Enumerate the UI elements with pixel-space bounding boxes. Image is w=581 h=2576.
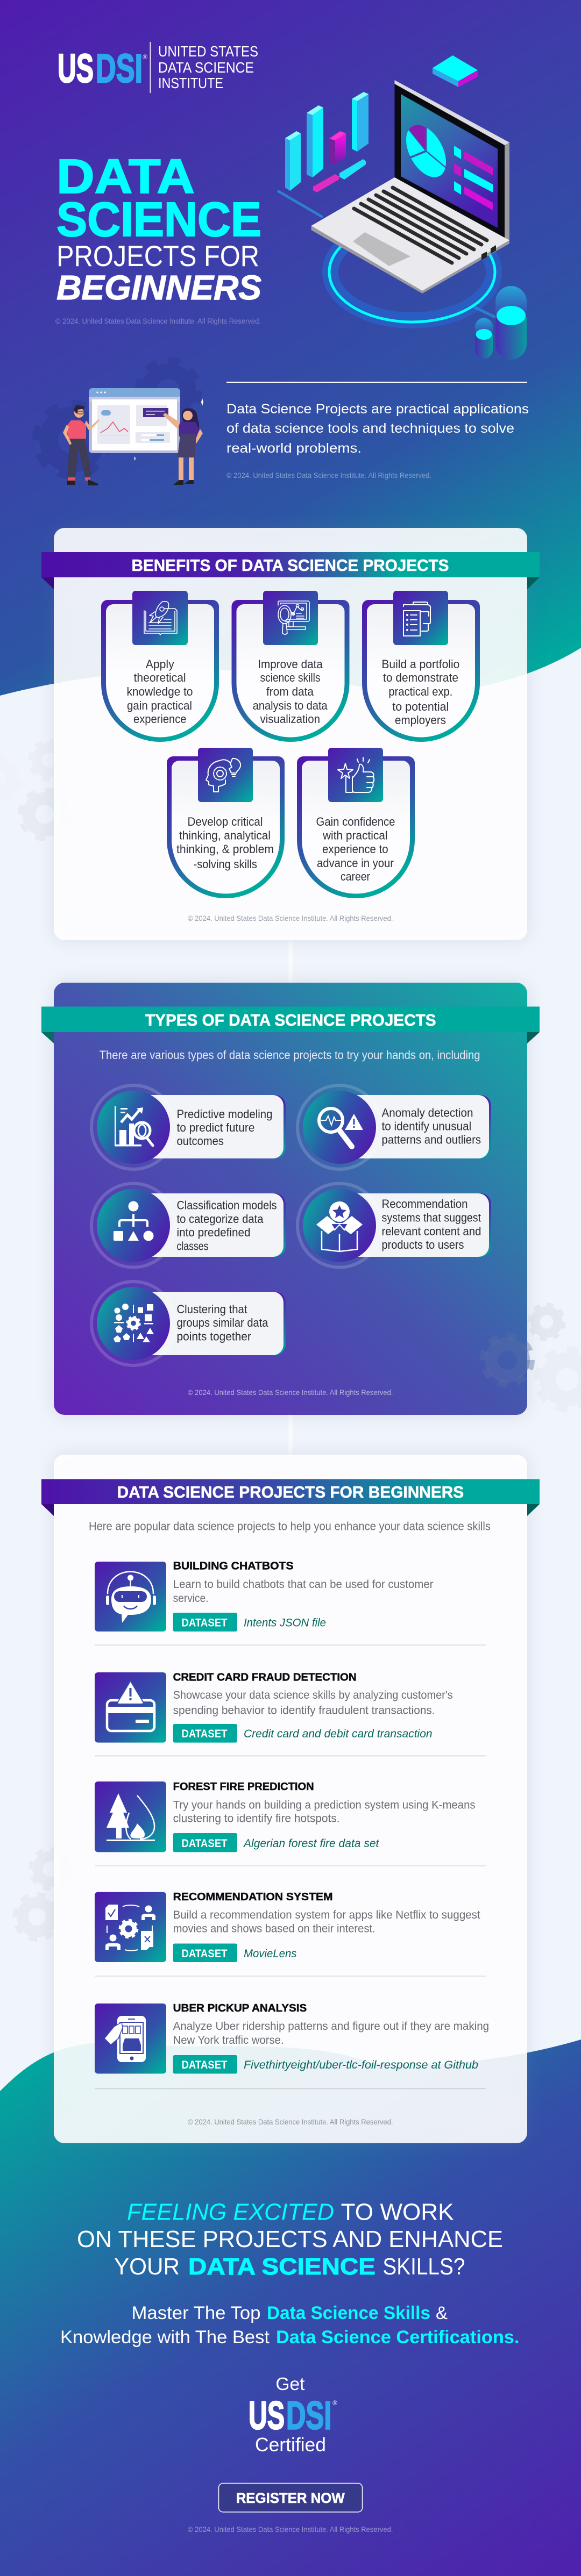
project description: clustering to identify fire hotspots. xyxy=(173,1813,340,1824)
project description: Build a recommendation system for apps like Netflix to suggest xyxy=(173,1909,480,1921)
types copyright: © 2024. United States Data Science Institute. All Rights Reserved. xyxy=(188,1388,393,1397)
type text: to identify unusual xyxy=(382,1120,471,1133)
benefit text: Gain confidence xyxy=(316,815,395,828)
project: credit card fraud detection xyxy=(95,1672,486,1757)
title: SCIENCE xyxy=(56,193,261,247)
dashboard window xyxy=(89,388,180,453)
type text xyxy=(176,1199,277,1253)
closing headline: TO WORK xyxy=(341,2199,454,2226)
project: recommendation system: MovieLens xyxy=(244,1948,297,1960)
type text: Classification models xyxy=(176,1199,277,1212)
project: credit card fraud detection: CREDIT CARD FRAUD DETECTION xyxy=(173,1672,357,1684)
benefit text: to demonstrate xyxy=(383,671,458,684)
dataset badge xyxy=(173,1724,237,1743)
project description: service. xyxy=(173,1592,209,1605)
benefit text: experience xyxy=(133,712,186,726)
logo: USDSI header: DSI xyxy=(96,46,143,91)
icon: phone with car xyxy=(104,2016,146,2062)
type text xyxy=(382,1106,481,1146)
type: classification models xyxy=(91,1184,286,1268)
icon: book and rocket xyxy=(144,602,177,635)
type text xyxy=(176,1303,268,1343)
benefit text: Build a portfolio xyxy=(381,657,459,671)
benefits card background xyxy=(54,528,527,940)
benefit text: visualization xyxy=(260,712,320,726)
project: uber pickup analysis: UBER PICKUP ANALYSIS xyxy=(173,2002,307,2014)
intro text block: © 2024. United States Data Science Institute. All Rights Reserved. xyxy=(226,471,431,480)
project description: movies and shows based on their interest. xyxy=(173,1923,375,1935)
type text xyxy=(176,1107,272,1148)
benefit text: Improve data xyxy=(258,657,323,671)
closing subheading: Data Science Skills xyxy=(267,2303,430,2323)
benefit text: career xyxy=(341,870,370,883)
title: PROJECTS FOR xyxy=(56,239,259,273)
type text: Recommendation xyxy=(382,1197,468,1211)
woman figure xyxy=(163,408,203,485)
icon: thumbs up with star xyxy=(338,757,374,792)
laptop base and keyboard xyxy=(311,177,509,294)
sparkles xyxy=(134,398,203,461)
project description: spending behavior to identify fraudulent transactions. xyxy=(173,1704,435,1717)
dataset badge xyxy=(173,1613,237,1632)
benefit text: advance in your xyxy=(317,856,394,870)
project: forest fire prediction: FOREST FIRE PREDICTION xyxy=(173,1781,314,1793)
projects subtitle: Here are popular data science projects to help you enhance your data science skills xyxy=(89,1519,491,1533)
icon: gift box with badge xyxy=(316,1201,363,1251)
benefit text: Apply xyxy=(146,657,174,671)
benefits ribbon heading: BENEFITS OF DATA SCIENCE PROJECTS xyxy=(131,556,449,575)
benefit text: Develop critical xyxy=(187,815,263,828)
closing subheading xyxy=(60,2303,520,2348)
benefit text: analysis to data xyxy=(253,699,328,712)
types subtitle: There are various types of data science projects to try your hands on, including xyxy=(100,1048,480,1062)
type text: groups similar data xyxy=(176,1316,268,1329)
type text: patterns and outliers xyxy=(382,1133,481,1146)
project: building chatbots: Intents JSON file xyxy=(244,1617,326,1629)
type text xyxy=(382,1197,481,1251)
project description: Showcase your data science skills by analyzing customer's xyxy=(173,1689,453,1701)
benefit text: practical exp. xyxy=(388,685,452,698)
register button xyxy=(218,2484,363,2512)
intro text block: of data science tools and techniques to solve xyxy=(226,421,514,436)
types card background xyxy=(54,983,527,1415)
type text: systems that suggest xyxy=(382,1211,481,1225)
benefit text xyxy=(316,815,395,883)
project description: Learn to build chatbots that can be used for customer xyxy=(173,1578,434,1591)
closing headline: DATA SCIENCE xyxy=(188,2253,375,2280)
benefit: apply theoretical knowledge xyxy=(101,591,219,742)
benefit text xyxy=(176,815,274,871)
logo: USDSI header: INSTITUTE xyxy=(158,75,223,91)
intro text block xyxy=(226,382,529,480)
dataset badge: DATASET xyxy=(182,1617,228,1629)
closing subheading: Knowledge with The Best xyxy=(60,2327,270,2348)
closing headline: YOUR xyxy=(114,2253,180,2280)
benefit text: science skills xyxy=(260,671,321,684)
project description xyxy=(173,1799,476,1824)
intro text block: Data Science Projects are practical applications xyxy=(226,402,529,417)
title xyxy=(56,150,261,307)
projects copyright: © 2024. United States Data Science Institute. All Rights Reserved. xyxy=(188,2117,393,2126)
icon: hierarchy of shapes xyxy=(114,1201,154,1241)
project description xyxy=(173,2020,489,2047)
laptop screen xyxy=(395,80,509,240)
icon: credit card with warning xyxy=(107,1681,154,1731)
intro text block: real-world problems. xyxy=(226,441,362,456)
dataset badge: DATASET xyxy=(182,1948,228,1960)
project: uber pickup analysis: Fivethirtyeight/uber-tlc-foil-response at Github xyxy=(244,2059,478,2071)
logo: USDSI header: UNITED STATES xyxy=(158,43,258,60)
closing headline: SKILLS? xyxy=(382,2253,465,2280)
type: predictive modeling xyxy=(91,1085,286,1169)
projects ribbon heading xyxy=(41,1479,540,1516)
panel: benefits xyxy=(41,528,540,940)
decorative gears: left of benefits panel xyxy=(0,742,68,838)
closing headline: ON THESE PROJECTS AND ENHANCE xyxy=(77,2226,503,2252)
type text: outcomes xyxy=(176,1134,224,1148)
benefit text: employers xyxy=(395,713,446,727)
projects ribbon heading: DATA SCIENCE PROJECTS FOR BEGINNERS xyxy=(117,1483,464,1501)
background gears xyxy=(38,362,197,474)
benefit text: from data xyxy=(266,685,314,698)
title: DATA xyxy=(56,150,195,204)
benefit text: -solving skills xyxy=(194,857,257,871)
get USDSI certified: Get xyxy=(275,2374,304,2394)
type text: Anomaly detection xyxy=(382,1106,473,1119)
project: uber pickup analysis xyxy=(95,2002,489,2089)
logo: USDSI header: US xyxy=(58,46,94,91)
benefit text: gain practical xyxy=(127,699,192,712)
panel: types xyxy=(41,983,540,1415)
closing subheading: Master The Top xyxy=(131,2303,260,2323)
title: BEGINNERS xyxy=(56,268,261,307)
closing headline: FEELING EXCITED xyxy=(127,2199,334,2226)
project: forest fire prediction xyxy=(95,1781,486,1866)
floating cube xyxy=(433,55,478,87)
benefit text: to potential xyxy=(392,700,449,713)
project: credit card fraud detection: Credit card and debit card transaction xyxy=(244,1728,433,1740)
footer copyright: © 2024. United States Data Science Institute. All Rights Reserved. xyxy=(188,2525,393,2534)
benefit: improve data science skills xyxy=(231,591,350,742)
type text: Clustering that xyxy=(176,1303,247,1316)
type: anomaly detection xyxy=(297,1085,491,1169)
type text: points together xyxy=(176,1330,251,1343)
benefit: gain confidence xyxy=(297,748,415,898)
project: recommendation system: RECOMMENDATION SYSTEM xyxy=(173,1891,333,1903)
icon: monitor and magnifier xyxy=(278,601,309,634)
types ribbon heading: TYPES OF DATA SCIENCE PROJECTS xyxy=(145,1011,436,1029)
project: forest fire prediction: Algerian forest fire data set xyxy=(243,1837,380,1850)
project description xyxy=(173,1578,434,1605)
ring under laptop xyxy=(278,191,498,322)
benefit text: knowledge to xyxy=(127,685,193,698)
project description xyxy=(173,1909,480,1935)
get USDSI certified: US xyxy=(249,2394,285,2438)
logo: USDSI header: ® xyxy=(143,53,147,61)
closing headline xyxy=(77,2199,503,2280)
project description: New York traffic worse. xyxy=(173,2034,284,2047)
project: recommendation system xyxy=(95,1891,486,1977)
project: building chatbots: BUILDING CHATBOTS xyxy=(173,1561,294,1572)
icon: clustered shapes around gear xyxy=(114,1304,154,1342)
man figure xyxy=(63,405,100,485)
dataset badge: DATASET xyxy=(182,2059,228,2071)
illustration: isometric laptop with charts xyxy=(278,55,527,360)
decorative gears: right of types panel xyxy=(530,1305,581,1408)
dataset badge: DATASET xyxy=(182,1728,228,1740)
benefit text: theoretical xyxy=(134,671,186,684)
closing subheading: Data Science Certifications. xyxy=(276,2327,520,2348)
type text: classes xyxy=(176,1239,209,1253)
type text: into predefined xyxy=(176,1226,251,1239)
benefits ribbon heading xyxy=(41,552,540,589)
benefits copyright: © 2024. United States Data Science Institute. All Rights Reserved. xyxy=(188,914,393,922)
icon: chart with magnifier xyxy=(115,1106,153,1146)
get USDSI certified: ® xyxy=(332,2399,337,2407)
get USDSI certified xyxy=(249,2374,337,2456)
project description: Try your hands on building a prediction system using K-means xyxy=(173,1799,476,1812)
logo: USDSI header: DATA SCIENCE xyxy=(158,59,254,76)
illustration: two people presenting at dashboard xyxy=(38,362,203,485)
icon: chatbot xyxy=(106,1572,156,1623)
icon: tree and flame xyxy=(107,1793,155,1841)
benefit: build a portfolio xyxy=(362,591,480,742)
type text: products to users xyxy=(382,1238,464,1251)
benefit text xyxy=(381,657,459,727)
type text: Predictive modeling xyxy=(176,1107,272,1121)
benefit text xyxy=(127,657,193,726)
icon: magnifier with warning xyxy=(319,1108,363,1147)
decorative gears: left of projects panel xyxy=(16,1850,69,1938)
dataset badge xyxy=(173,2055,237,2074)
types ribbon heading xyxy=(41,1006,540,1043)
get USDSI certified: Certified xyxy=(255,2434,326,2456)
benefit text: experience to xyxy=(322,842,388,856)
hero copyright: © 2024. United States Data Science Institute. All Rights Reserved. xyxy=(55,317,261,325)
dataset badge xyxy=(173,1944,237,1962)
icon: head with gear and bulb xyxy=(206,759,240,792)
get USDSI certified: DSI xyxy=(286,2394,331,2438)
type text: relevant content and xyxy=(382,1225,481,1238)
type: clustering xyxy=(91,1282,286,1365)
panel: beginner projects xyxy=(41,1455,540,2143)
cylinders xyxy=(475,286,527,360)
project description: Analyze Uber ridership patterns and figure out if they are making xyxy=(173,2020,489,2033)
3D bar chart xyxy=(285,92,369,192)
project description xyxy=(173,1689,453,1717)
icon: portfolio briefcase and list xyxy=(403,602,430,636)
dataset badge xyxy=(173,1833,237,1852)
icon: recommendation cycle xyxy=(105,1905,155,1950)
benefit text xyxy=(253,657,328,726)
logo: USDSI header xyxy=(58,42,258,93)
type: recommendation systems xyxy=(297,1184,491,1268)
benefit text: thinking, analytical xyxy=(179,829,271,842)
dataset badge: DATASET xyxy=(182,1837,228,1850)
closing subheading: & xyxy=(436,2303,448,2323)
register button: REGISTER NOW xyxy=(236,2490,345,2506)
benefit text: with practical xyxy=(322,829,387,842)
gear over types card xyxy=(484,1336,531,1384)
benefit text: thinking, & problem xyxy=(176,842,274,856)
type text: to categorize data xyxy=(176,1212,264,1226)
benefit: develop critical thinking xyxy=(167,748,285,898)
project: building chatbots xyxy=(95,1561,486,1646)
projects card background xyxy=(54,1455,527,2143)
type text: to predict future xyxy=(176,1121,255,1134)
